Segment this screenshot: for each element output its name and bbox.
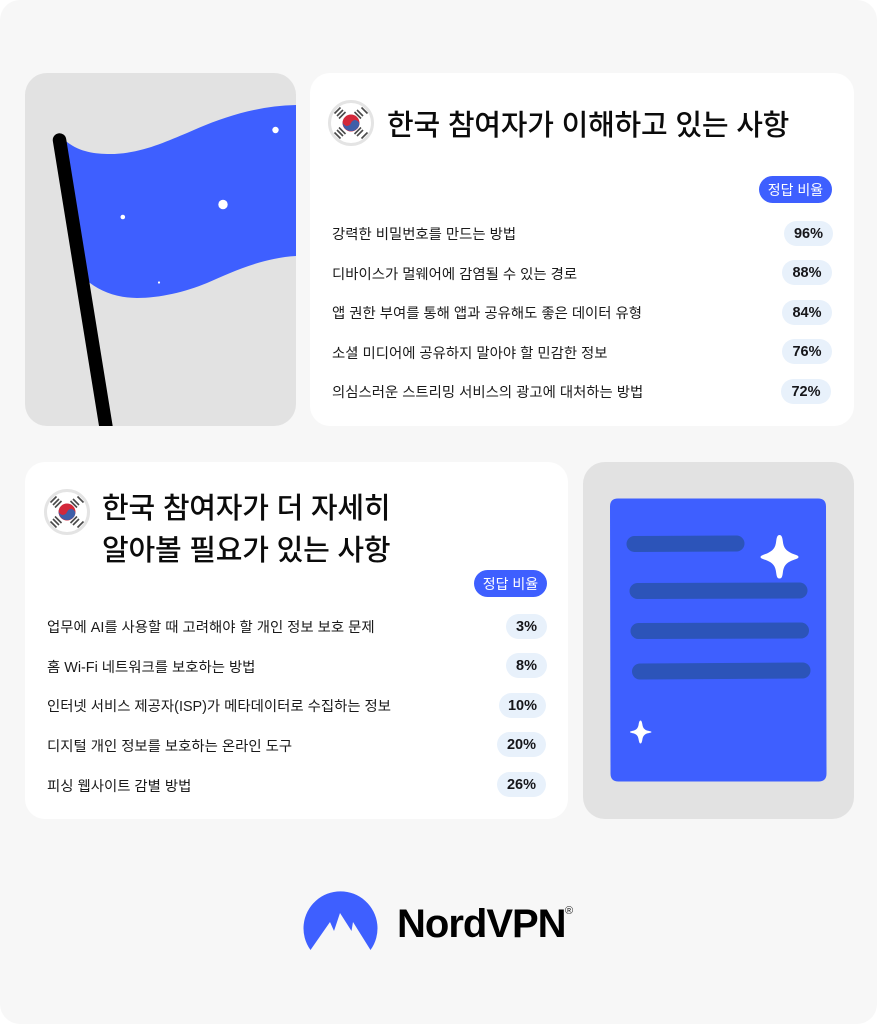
panel: topics to learn more (25, 462, 568, 819)
icon: small sparkle (630, 720, 652, 744)
row 3: 인터넷 서비스 제공자(ISP)가 메타데이터로 수집하는 정보 (47, 699, 391, 715)
panel: document illustration (583, 462, 854, 819)
badge: correct answer rate: 정답 비율 (483, 576, 538, 592)
panel: flag illustration (25, 73, 296, 426)
value 2: 8% (516, 658, 537, 674)
value 3 (499, 693, 546, 718)
value 1 (784, 221, 833, 246)
row 4: 디지털 개인 정보를 보호하는 온라인 도구 (47, 739, 292, 755)
value 5: 72% (791, 384, 821, 400)
value 3: 10% (508, 698, 537, 714)
icon: flag pole (60, 140, 106, 430)
value 1: 3% (516, 619, 537, 635)
registered mark: ® (565, 905, 573, 917)
icon: blue document (610, 498, 826, 782)
heading: 한국 참여자가 더 자세히 (102, 493, 390, 525)
heading: 알아볼 필요가 있는 사항 (102, 535, 390, 567)
badge: correct answer rate: 정답 비율 (768, 182, 823, 198)
value 5: 26% (507, 777, 536, 793)
row 5: 피싱 웹사이트 감별 방법 (47, 779, 191, 795)
value 4: 20% (507, 737, 536, 753)
icon: Korean flag badge (44, 489, 90, 535)
heading (102, 493, 390, 567)
row 1: 강력한 비밀번호를 만드는 방법 (332, 227, 516, 243)
icon: Korean flag badge (328, 100, 374, 146)
value 4 (782, 339, 832, 364)
row 3: 앱 권한 부여를 통해 앱과 공유해도 좋은 데이터 유형 (332, 306, 642, 322)
row 4: 소셜 미디어에 공유하지 말아야 할 민감한 정보 (332, 346, 608, 362)
value 2 (782, 260, 832, 285)
row 5: 의심스러운 스트리밍 서비스의 광고에 대처하는 방법 (332, 385, 643, 401)
value 3 (782, 300, 832, 325)
value 1: 96% (794, 226, 823, 242)
icon: blue flag (62, 105, 296, 298)
value 4 (497, 732, 546, 757)
icon: NordVPN mountain (304, 891, 378, 950)
badge: correct answer rate (759, 176, 832, 203)
row 2: 디바이스가 멀웨어에 감염될 수 있는 경로 (332, 267, 577, 283)
value 5 (497, 772, 546, 797)
value 1 (506, 614, 547, 639)
value 5 (781, 379, 831, 404)
value 3: 84% (792, 305, 822, 321)
value 2: 88% (792, 265, 822, 281)
value 2 (506, 653, 547, 678)
logo: NordVPN (304, 891, 573, 950)
row 2: 홈 Wi-Fi 네트워크를 보호하는 방법 (47, 660, 255, 676)
panel: understood topics (310, 73, 854, 426)
value 4: 76% (792, 344, 822, 360)
row 1: 업무에 AI를 사용할 때 고려해야 할 개인 정보 보호 문제 (47, 620, 375, 636)
icon: large sparkle (760, 535, 798, 578)
wordmark: NordVPN (397, 902, 566, 946)
heading: 한국 참여자가 이해하고 있는 사항 (387, 110, 789, 142)
badge: correct answer rate (474, 570, 547, 597)
